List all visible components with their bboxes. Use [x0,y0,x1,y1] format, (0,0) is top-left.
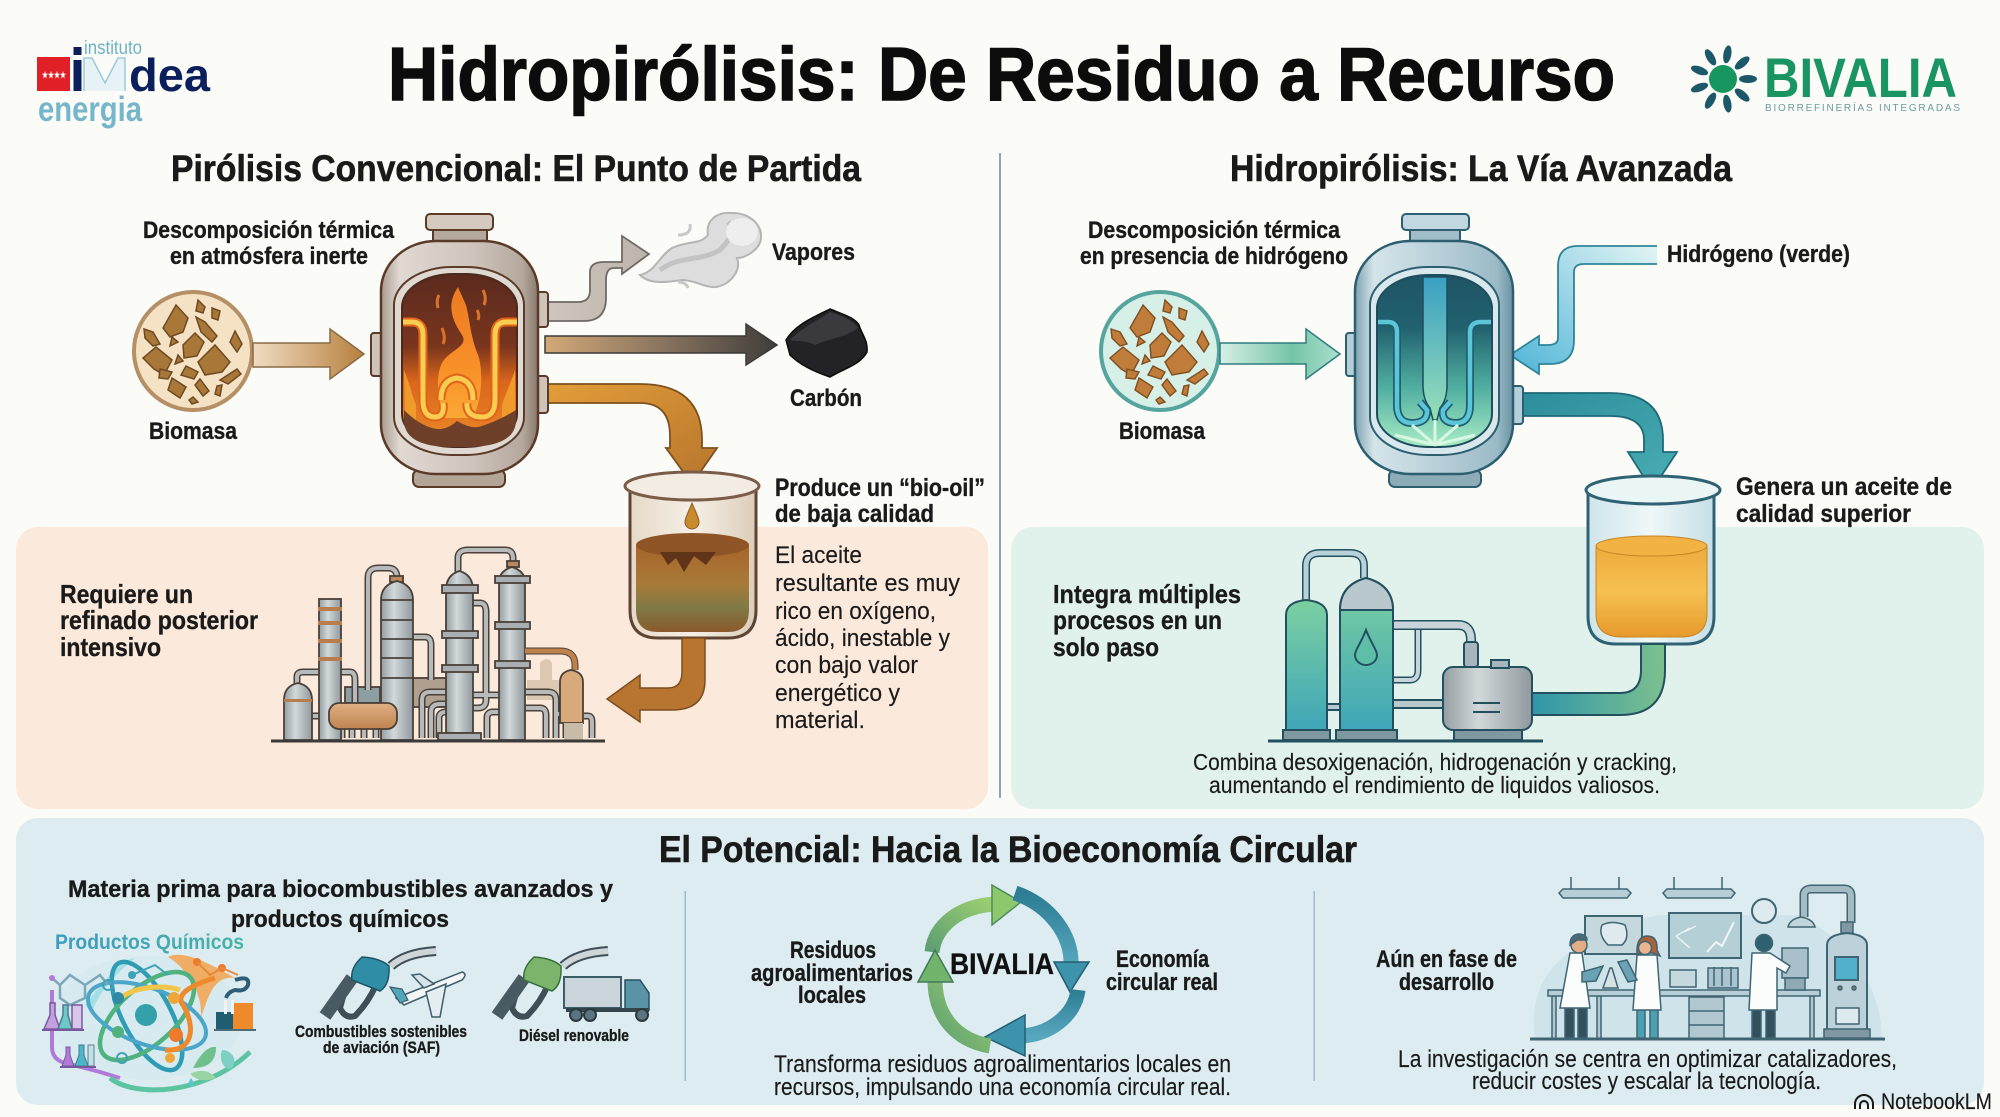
panel: integration backdrop (green) [1011,527,1984,809]
label: thermal decomposition, inert: Descomposición térmica [143,217,395,244]
logo: IMDEA Energía: instituto [84,38,142,59]
text: bio-oil description: resultante es muy [775,570,960,597]
icon: SAF nozzle and plane [325,951,465,1017]
icon: process unit with tanks and pump [1268,553,1665,742]
label: upper quality oil: calidad superior [1736,500,1911,528]
label: thermal decomposition, hydrogen: en presencia de hidrógeno [1080,243,1348,270]
label: SAF [295,1022,467,1057]
text: combined processes: aumentando el rendimiento de liquidos valiosos. [1209,772,1660,798]
label: integrates processes: procesos en un [1053,605,1222,635]
icon: conventional reactor [371,214,548,487]
logo: IMDEA Energía: ★★★★ [42,70,67,80]
label: carbon: Carbón [790,385,862,412]
label: still in development: desarrollo [1399,969,1494,996]
arrow: charcoal [545,324,777,365]
label: thermal decomposition, hydrogen [1080,217,1348,270]
text: transforms residues [774,1051,1231,1101]
logo: BIVALIA [1690,45,1960,114]
text: raw material heading: Materia prima para biocombustibles avanzados y [68,876,614,903]
heading: potential: El Potencial: Hacia la Bioeconomía Circular [659,829,1357,870]
label: agri-food residues [751,937,913,1009]
label: BIVALIA center: BIVALIA [950,948,1054,981]
title: Hidropirólisis: De Residuo a Recurso [388,32,1615,116]
label: hydrogen: Hidrógeno (verde) [1667,241,1850,268]
divider right [1314,891,1315,1081]
label: real circular economy [1106,946,1218,996]
label: thermal decomposition, inert: en atmósfera inerte [170,243,368,270]
text: research focus: reducir costes y escalar la tecnología. [1472,1068,1821,1095]
label: SAF: Combustibles sostenibles [295,1022,467,1041]
panel: potential backdrop (blue) [16,818,1984,1105]
text: bio-oil description: El aceite [775,542,862,569]
arrow: oil down to clean beaker [1520,393,1677,490]
label: integrates processes: Integra múltiples [1053,579,1241,609]
heading: hydropyrolysis: Hidropirólisis: La Vía Avanzada [1230,148,1732,189]
label: biomasa right: Biomasa [1119,418,1206,445]
logo: IMDEA Energía [37,38,210,129]
label: agri-food residues: locales [798,982,866,1009]
label: real circular economy: Economía [1116,946,1210,973]
text: bio-oil description [775,542,960,734]
label: chemical products: Productos Químicos [55,931,244,954]
icon: bio-oil beaker [625,472,759,638]
arrow: biomass into green reactor [1220,329,1340,379]
central tube and U-coils [1423,277,1447,420]
panel: refining backdrop (peach) [16,527,988,809]
icon: biomass circle (right) [1101,292,1219,410]
text: transforms residues: recursos, impulsando una economía circular real. [774,1074,1231,1101]
arrow: vapors [545,236,649,321]
label: requires refining: Requiere un [60,579,193,609]
label: upper quality oil [1736,473,1952,528]
text: transforms residues: Transforma residuos agroalimentarios locales en [774,1051,1231,1078]
logo: IMDEA Energía: dea [129,49,210,101]
flame [438,287,481,418]
text: raw material heading [68,876,614,933]
icon: clean oil beaker [1586,476,1720,644]
text: bio-oil description: energético y [775,680,900,707]
label: biomasa left: Biomasa [149,418,238,445]
label: agri-food residues: agroalimentarios [751,960,913,987]
icon: vapor cloud [640,213,761,288]
label: SAF: de aviación (SAF) [323,1038,440,1057]
arrow: biomass into reactor [253,329,364,379]
arrow: oil down to beaker [545,384,717,484]
label: bio-oil: de baja calidad [775,500,934,528]
text: bio-oil description: rico en oxígeno, [775,598,936,625]
text: combined processes [1193,749,1677,798]
logo: BIVALIA: BIORREFINERÍAS INTEGRADAS [1765,101,1960,114]
label: real circular economy: circular real [1106,969,1218,996]
text: combined processes: Combina desoxigenación, hidrogenación y cracking, [1193,749,1677,775]
label: still in development [1376,946,1517,996]
label: still in development: Aún en fase de [1376,946,1517,973]
label: vapores: Vapores [772,239,855,266]
divider left [684,891,686,1081]
icon: chemistry cluster [42,952,256,1090]
icon: coal [786,309,867,377]
text: raw material heading: productos químicos [231,906,449,933]
label: integrates processes [1053,579,1241,662]
arrow: hydrogen input [1510,246,1657,374]
text: bio-oil description: con bajo valor [775,652,918,679]
label: diesel: Diésel renovable [519,1026,629,1045]
label: thermal decomposition, hydrogen: Descomposición térmica [1088,217,1341,244]
text: research focus [1398,1046,1897,1095]
logo: IMDEA Energía: energia [38,90,142,129]
text: bio-oil description: material. [775,707,865,734]
icon: biomass circle (left) [134,292,252,410]
icon: circular cycle arrows [918,885,1089,1056]
divider between the two process columns [999,153,1001,798]
label: requires refining: intensivo [60,632,161,662]
text: research focus: La investigación se centra en optimizar catalizadores, [1398,1046,1897,1073]
label: requires refining [60,579,258,662]
icon: diesel nozzle and truck [497,951,649,1021]
label: upper quality oil: Genera un aceite de [1736,473,1952,501]
label: agri-food residues: Residuos [790,937,876,964]
label: thermal decomposition, inert [143,217,395,270]
arrow: beaker down to refinery [607,638,705,722]
text: bio-oil description: ácido, inestable y [775,625,950,652]
icon: laboratory scene [1530,877,1885,1040]
label: bio-oil: Produce un “bio-oil” [775,474,985,502]
label: integrates processes: solo paso [1053,632,1159,662]
icon: refinery [271,550,605,742]
label: bio-oil [775,474,985,528]
label: requires refining: refinado posterior [60,605,258,635]
logo: BIVALIA: BIVALIA [1764,46,1957,109]
heading: conventional pyrolysis: Pirólisis Convencional: El Punto de Partida [171,148,861,189]
icon: hydropyrolysis reactor [1346,214,1523,487]
